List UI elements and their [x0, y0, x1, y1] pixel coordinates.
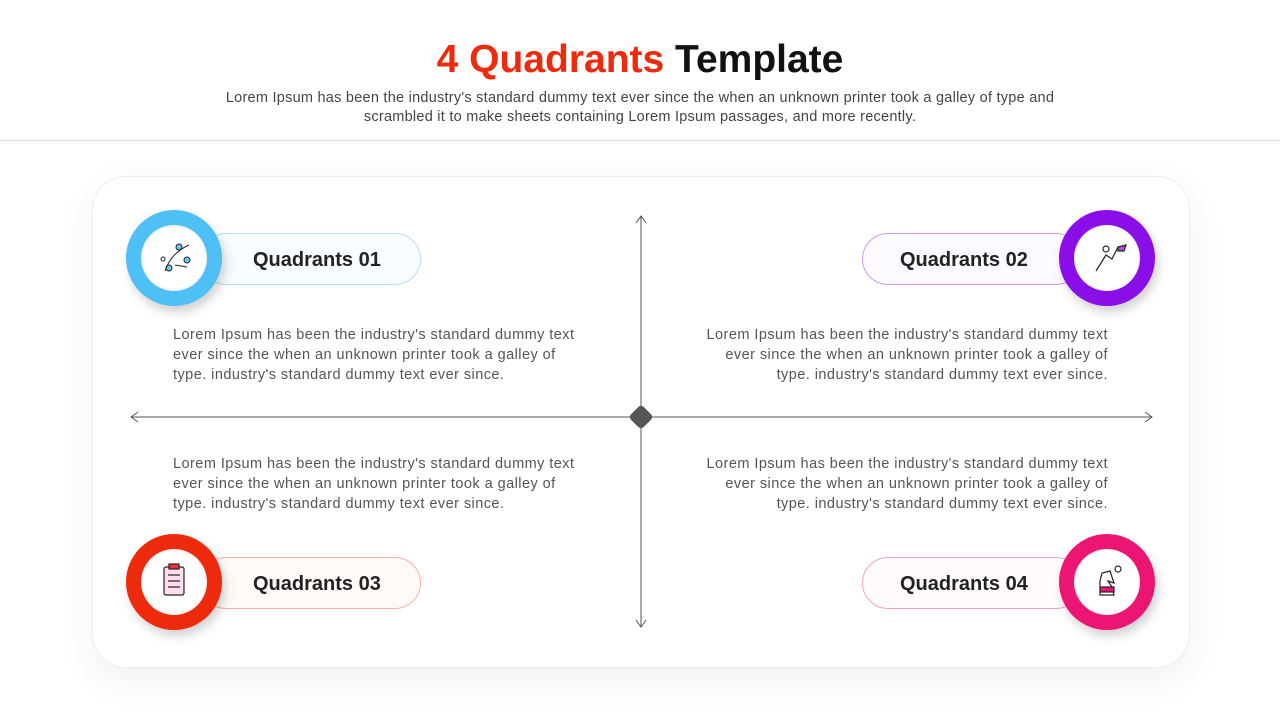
pill: Quadrants 01: Quadrants 01 — [253, 249, 381, 271]
pill: Quadrants 04 — [862, 557, 1082, 609]
pill: Quadrants 03: Quadrants 03 — [253, 573, 381, 595]
text: quadrant 4: Lorem Ipsum has been the industry's standard dummy text ever since the when an unknown printer took a galley of type. industry's standard dummy text ever since. — [707, 456, 1108, 512]
text: quadrant 2: Lorem Ipsum has been the industry's standard dummy text ever since the when an unknown printer took a galley of type. industry's standard dummy text ever since. — [707, 327, 1108, 383]
title: 4 Quadrants Template — [437, 38, 843, 81]
panel: main card — [92, 176, 1190, 668]
icon: circle 04 — [1059, 534, 1155, 630]
text: quadrant 3: Lorem Ipsum has been the industry's standard dummy text ever since the when an unknown printer took a galley of type. industry's standard dummy text ever since. — [173, 456, 574, 512]
text: quadrant 1: Lorem Ipsum has been the industry's standard dummy text ever since the when an unknown printer took a galley of type. industry's standard dummy text ever since. — [173, 327, 574, 383]
icon: circle 01 — [126, 210, 222, 306]
subtitle: Lorem Ipsum has been the industry's standard dummy text ever since the when an unknown printer took a galley of type and scrambled it to make sheets containing Lorem Ipsum passages, and more recently. — [226, 90, 1054, 125]
pill: Quadrants 01 — [200, 233, 421, 285]
pill: Quadrants 04: Quadrants 04 — [900, 573, 1028, 595]
icon: circle 02 — [1059, 210, 1155, 306]
icon: circle 03 — [126, 534, 222, 630]
pill: Quadrants 03 — [200, 557, 421, 609]
pill: Quadrants 02: Quadrants 02 — [900, 249, 1028, 271]
pill: Quadrants 02 — [862, 233, 1082, 285]
